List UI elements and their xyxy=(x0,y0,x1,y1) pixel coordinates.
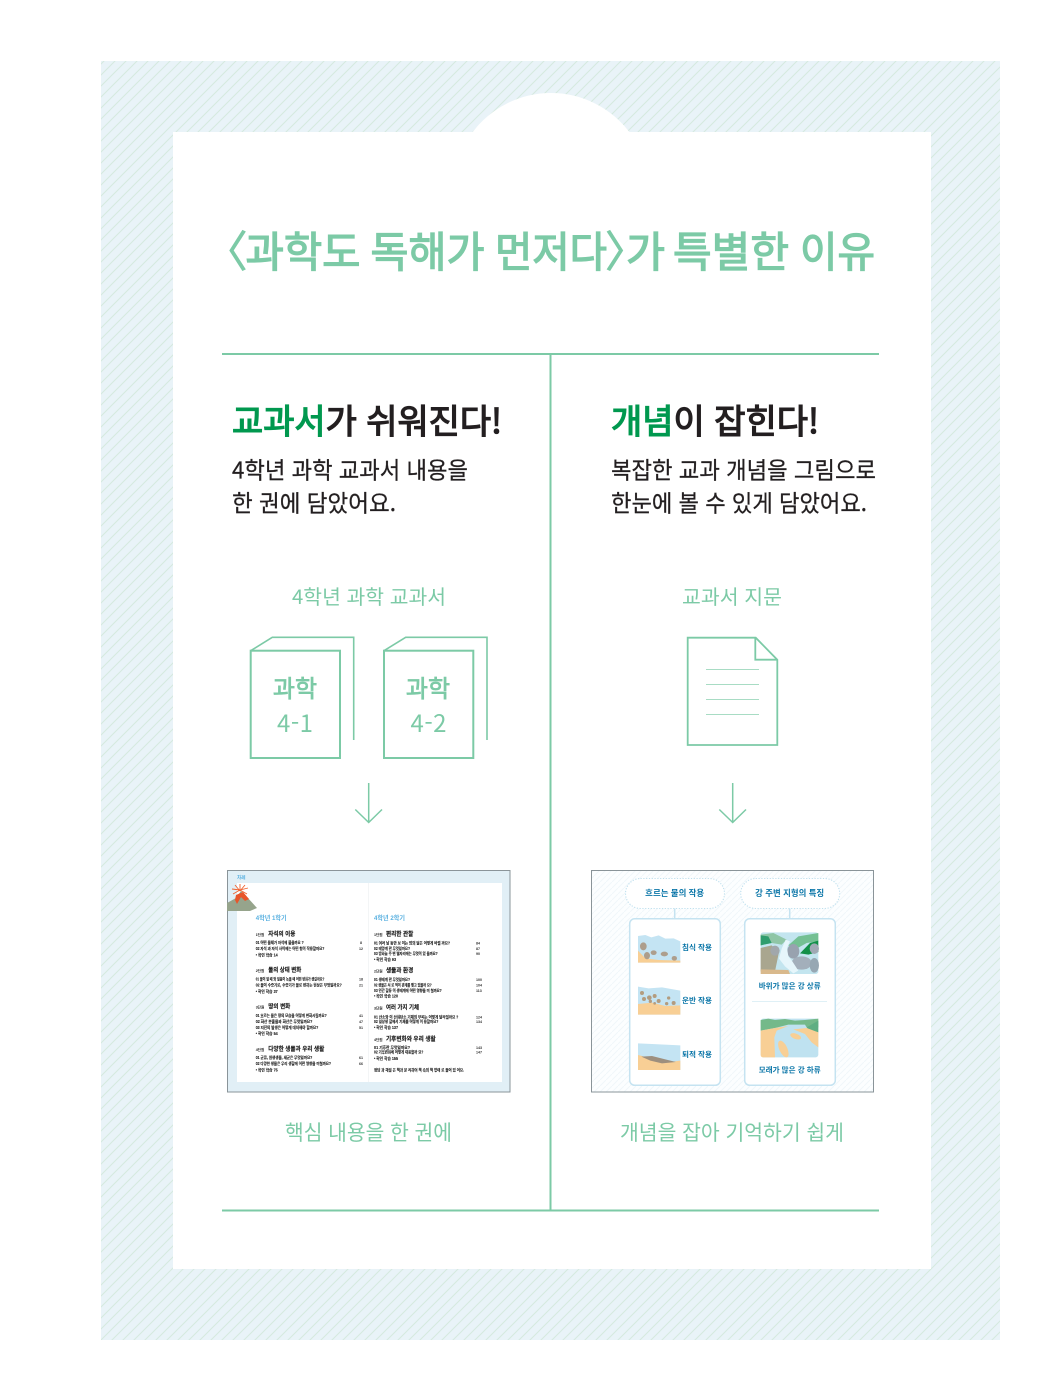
text: grade 4 second semester contents: 4단원 xyxy=(374,1037,383,1042)
text: grade 4 second semester contents: 03 인간 활동 이 생태계에 어떤 영향을 미 칠까요? xyxy=(374,987,442,993)
description text: 4학년 과학 교과서 내용을 xyxy=(232,452,468,486)
pill: action of flowing water xyxy=(626,878,724,908)
text: grade 4 second semester contents: 87 xyxy=(476,947,480,951)
panel: right column, concepts xyxy=(592,394,876,1147)
text: grade 4 second semester contents: 2단원 xyxy=(374,969,383,974)
description text: 복잡한 교과 개념을 그림으로 xyxy=(611,452,876,486)
text: grade 4 second semester contents: • 확인 학습 155 xyxy=(374,1055,399,1061)
illustration: erosion xyxy=(638,935,680,963)
text: grade 4 first semester contents: 03 지진의 발생은 어떻게 대처해야 할까요? xyxy=(256,1024,319,1030)
text: grade 4 second semester contents: 편리한 관찰 xyxy=(386,930,414,938)
icon: science book 4-1: 4-1 xyxy=(277,704,313,739)
text: grade 4 first semester contents: 18 xyxy=(359,978,363,982)
text: grade 4 first semester contents: 02 자석 과 자석 사이에는 어떤 힘이 작용할까요? xyxy=(256,945,325,951)
icon: science book 4-1: 과학 xyxy=(273,669,317,704)
title: 이유 xyxy=(800,219,875,280)
text: grade 4 first semester contents: 02 화산 분출물과 화산은 무엇일까요? xyxy=(256,1018,313,1024)
text: grade 4 first semester contents xyxy=(256,913,363,1072)
box: three water actions: 침식 작용 xyxy=(682,942,712,952)
text: grade 4 first semester contents: 12 xyxy=(359,947,363,951)
text: grade 4 first semester contents: 02 물이 수증기로, 수증기가 물로 변하는 현상은 무엇일까요? xyxy=(256,982,342,988)
text: grade 4 first semester contents: 47 xyxy=(359,1020,363,1024)
title: 가 xyxy=(626,219,665,280)
title xyxy=(204,218,875,280)
text: grade 4 first semester contents: 21 xyxy=(359,984,363,988)
text: grade 4 second semester contents: 01 생태계 란 무엇일까요? xyxy=(374,976,410,982)
text: grade 4 second semester contents: 4학년 2학기 xyxy=(374,913,405,922)
text: grade 4 second semester contents: 01 산소와 이 산화탄소 기체의 부피는 어떻게 달라질까요 ? xyxy=(374,1014,459,1020)
text: grade 4 first semester contents: • 확인 학습 54 xyxy=(256,1030,278,1036)
text: grade 4 second semester contents: 143 xyxy=(476,1046,482,1050)
thumbnail: table of contents spread: 차례 xyxy=(237,874,245,881)
icon: science book 4-2: 4-2 xyxy=(410,704,446,739)
heading: textbook gets easier: 교과서가 쉬워진다! xyxy=(232,394,502,444)
text: grade 4 second semester contents: 여러 가지 기체 xyxy=(386,1004,419,1012)
description text: 한 권에 담았어요. xyxy=(232,484,396,518)
text: grade 4 second semester contents: 104 xyxy=(476,984,482,988)
text: grade 4 first semester contents: 66 xyxy=(359,1062,363,1066)
icon: science book 4-1 xyxy=(251,637,354,758)
illustration: transportation xyxy=(638,987,680,1015)
pill: riverside landforms xyxy=(741,878,840,908)
icon: document xyxy=(688,638,777,745)
connectors xyxy=(675,908,790,919)
description text xyxy=(611,452,876,518)
box: three water actions: 퇴적 작용 xyxy=(682,1049,712,1059)
text: grade 4 first semester contents: • 확인 학습 75 xyxy=(256,1066,278,1072)
caption: easy to grasp and remember concepts: 개념을 잡아 기억하기 쉽게 xyxy=(620,1117,844,1147)
box: upper and lower river: 바위가 많은 강 상류 xyxy=(759,980,821,990)
text: grade 4 second semester contents: 134 xyxy=(476,1020,482,1024)
text: grade 4 first semester contents: 다양한 생물과 우리 생활 xyxy=(268,1045,325,1053)
heading: concepts become clear: 개념이 잡힌다! xyxy=(611,394,819,444)
text: grade 4 first semester contents: 02 다양한 생물은 우리 생활에 어떤 영향을 미칠까요? xyxy=(256,1060,331,1066)
text: grade 4 first semester contents: • 확인 학습 37 xyxy=(256,988,278,994)
text: grade 4 second semester contents: 147 xyxy=(476,1050,482,1054)
text: grade 4 second semester contents: 113 xyxy=(476,989,482,993)
text: grade 4 first semester contents: 01 흐르는 물은 땅의 모습을 어떻게 변화시킬까요? xyxy=(256,1012,327,1018)
title: 독해가 xyxy=(370,219,484,280)
text: grade 4 second semester contents: 01 기후란 무엇일까요? xyxy=(374,1044,410,1050)
pill: riverside landforms: 강 주변 지형의 특징 xyxy=(755,888,824,898)
text: grade 4 second semester contents: 02 생물은 서 로 먹이 관계를 맺고 있을까 요? xyxy=(374,982,432,988)
title: 특별한 xyxy=(673,219,789,280)
background panel: hatched frame with white card xyxy=(101,61,1000,1340)
text: grade 4 first semester contents: 2단원 xyxy=(256,968,265,973)
illustration: deposition xyxy=(638,1043,680,1070)
text: grade 4 first semester contents: 3단원 xyxy=(256,1005,265,1010)
text: grade 4 second semester contents: 03 밤하늘 주 변 별자리에는 무엇이 있 을까요? xyxy=(374,950,438,956)
text: grade 4 second semester contents: 02 기후변화에 어떻게 대응할까 요? xyxy=(374,1048,424,1054)
text: grade 4 second semester contents: 1단원 xyxy=(374,932,383,937)
arrow: down, right xyxy=(719,783,746,822)
illustration: sandy lower river xyxy=(761,1019,818,1059)
text: grade 4 second semester contents: 124 xyxy=(476,1016,482,1020)
text: grade 4 second semester contents: 100 xyxy=(476,978,482,982)
title: 〉 xyxy=(605,218,648,280)
text: grade 4 first semester contents: 1단원 xyxy=(256,932,265,937)
panel: left column, textbook xyxy=(227,394,510,1147)
thumbnail: river concept page xyxy=(592,870,874,1092)
text: grade 4 second semester contents: • 확인 학습 137 xyxy=(374,1024,399,1030)
illustration: rocky upper river xyxy=(761,932,819,974)
text: grade 4 first semester contents: • 확인 학습 14 xyxy=(256,952,278,958)
thumbnail: table of contents spread xyxy=(227,870,510,1092)
text: grade 4 first semester contents: 물의 상태 변화 xyxy=(268,966,302,974)
text: grade 4 first semester contents: 01 물이 얼 때 와 얼음이 녹을 때 어떤 변화가 생길까요? xyxy=(256,976,325,982)
box: upper and lower river: 모래가 많은 강 하류 xyxy=(759,1064,821,1074)
divider lines xyxy=(222,354,879,1210)
text: grade 4 first semester contents: 01 균류, 원생생물, 세균은 무엇일까요? xyxy=(256,1054,313,1060)
title: 〈 xyxy=(204,218,248,280)
text: grade 4 first semester contents: 땅의 변화 xyxy=(268,1003,291,1011)
box: three water actions xyxy=(630,919,720,1085)
label: textbook passage: 교과서 지문 xyxy=(682,581,782,610)
arrow: down, left xyxy=(355,783,382,822)
text: grade 4 second semester contents xyxy=(374,913,482,1072)
title: 먼저다 xyxy=(495,219,607,280)
text: grade 4 first semester contents: 41 xyxy=(359,1014,363,1018)
text: grade 4 first semester contents: 61 xyxy=(359,1056,363,1060)
text: grade 4 first semester contents: 4학년 1학기 xyxy=(256,913,287,922)
text: grade 4 second semester contents: 정답 과 해설 은 책과 분 리하여 책 속의 책 형태 로 들어 있 어요. xyxy=(374,1066,464,1072)
text: grade 4 second semester contents: 90 xyxy=(476,952,480,956)
text: grade 4 first semester contents: 자석의 이용 xyxy=(268,930,296,938)
pill: action of flowing water: 흐르는 물의 작용 xyxy=(645,888,704,898)
description text: 한눈에 볼 수 있게 담았어요. xyxy=(611,484,867,518)
text: grade 4 first semester contents: 4단원 xyxy=(256,1047,265,1052)
text: grade 4 second semester contents: 생물과 환경 xyxy=(386,967,413,975)
caption: core content in one book: 핵심 내용을 한 권에 xyxy=(285,1117,452,1147)
description text xyxy=(232,452,468,518)
text: grade 4 second semester contents: 84 xyxy=(476,942,480,946)
text: grade 4 first semester contents: 8 xyxy=(360,941,362,945)
label: grade 4 science textbook: 4학년 과학 교과서 xyxy=(292,581,446,610)
text: grade 4 first semester contents: 51 xyxy=(359,1026,363,1030)
text: grade 4 second semester contents: 01 여러 날 동안 보 이는 밤의 달은 어떻게 바뀔 까요? xyxy=(374,940,450,946)
text: grade 4 second semester contents: 기후변화와 우리 생활 xyxy=(386,1035,436,1043)
text: grade 4 second semester contents: 3단원 xyxy=(374,1006,383,1011)
text: grade 4 second semester contents: 02 일상생 활에서 기체를 어떻게 이 용할까요? xyxy=(374,1018,439,1024)
icon: volcano xyxy=(227,884,257,911)
text: grade 4 second semester contents: • 확인 학습 93 xyxy=(374,956,397,962)
title: 과학도 xyxy=(246,219,360,280)
icon: science book 4-2: 과학 xyxy=(406,669,450,704)
box: three water actions: 운반 작용 xyxy=(682,995,712,1005)
box: upper and lower river xyxy=(745,919,835,1085)
text: grade 4 second semester contents: 02 태양계 란 무엇일까요? xyxy=(374,945,410,951)
icon: science book 4-2 xyxy=(384,637,487,758)
text: grade 4 second semester contents: • 확인 학습 120 xyxy=(374,992,399,998)
text: grade 4 first semester contents: 01 어떤 물체가 자석에 붙을까요 ? xyxy=(256,939,304,945)
